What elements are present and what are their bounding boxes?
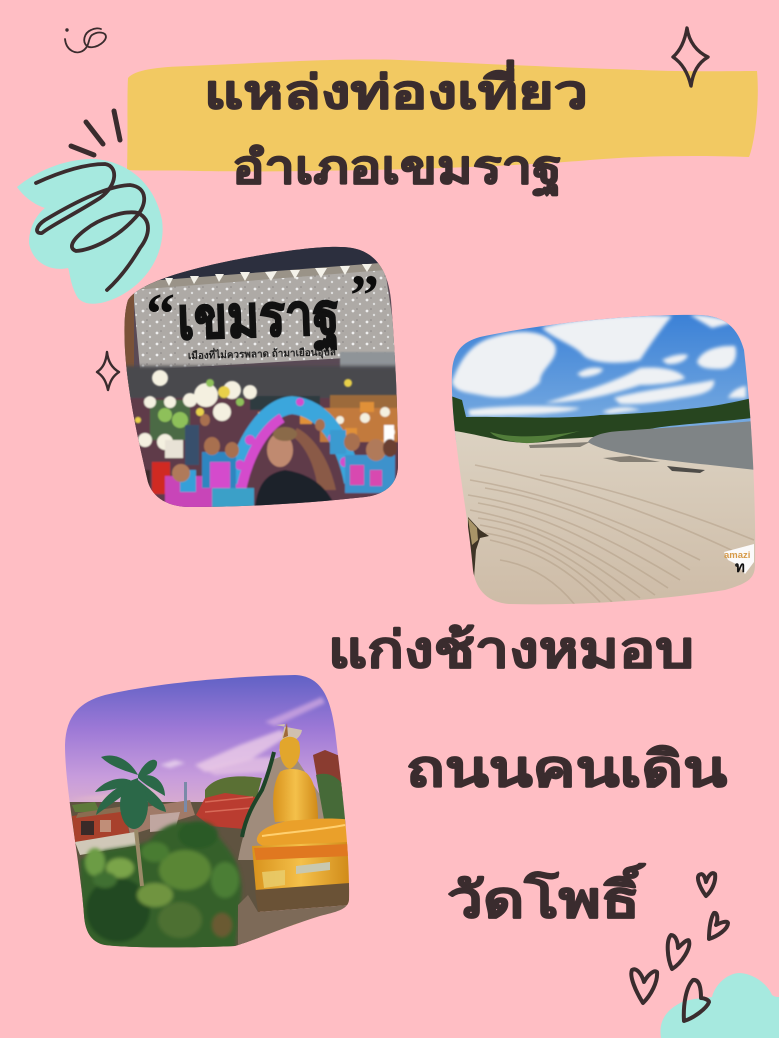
photo: Khemarat festival parade: [120, 244, 400, 510]
decoration: mint cloud bottom right: [660, 973, 779, 1038]
icon: small swirl doodle: [65, 28, 106, 52]
icons: hearts: [631, 873, 728, 1021]
photo: Wat Pho golden Buddha: [60, 672, 355, 952]
heading: Wat Pho: วัดโพธิ์: [447, 862, 646, 928]
title: อำเภอเขมราฐ: [232, 141, 562, 197]
title highlight band: [127, 59, 758, 171]
photo: Kaeng Chang Mob sand and river: [448, 312, 758, 610]
photo: Khemarat festival parade: เขมราฐ: [176, 281, 341, 357]
heading: Kaeng Chang Mob: แก่งช้างหมอบ: [328, 622, 694, 678]
photo: Khemarat festival parade: ”: [350, 263, 379, 328]
photo: Khemarat festival parade: เมืองที่ไม่ควรพลาด ถ้ามาเยือนอุบล: [188, 344, 336, 362]
icon: sparkle top right: [673, 28, 708, 86]
man in front: [254, 470, 332, 506]
heading: walking street: ถนนคนเดิน: [406, 741, 727, 797]
decoration: mint blob with scribble: [17, 111, 163, 304]
photo: Kaeng Chang Mob sand and river: ท: [735, 559, 745, 576]
crowd dots: [138, 370, 395, 450]
crowd right: [345, 455, 395, 493]
photo: Khemarat festival parade: “: [146, 281, 175, 346]
title: แหล่งท่องเที่ยว: [204, 60, 588, 118]
crowd left: [152, 462, 170, 494]
photo: Kaeng Chang Mob sand and river: amazi: [724, 550, 750, 561]
parade arch: [232, 405, 353, 498]
icon: sparkle left: [97, 352, 119, 390]
title: [204, 60, 588, 197]
